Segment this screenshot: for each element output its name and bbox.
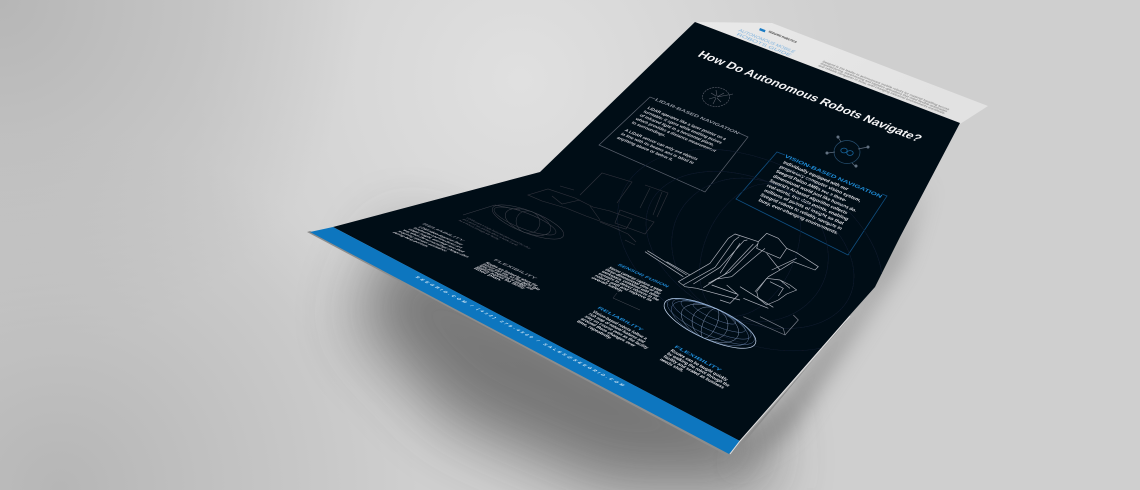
dark poster face [333,22,960,441]
icon: lidar [702,88,733,106]
body: lidar: in line with its beams and is blind to [620,132,696,165]
body: vision: Seegrid's AI-based algorithm collects [768,178,849,215]
text block: flexibility: facility and scaled as business [662,354,726,390]
text block: dim reliability: requiring operator assistance [396,230,449,252]
body: vision: busy, ever-changing environments. [757,198,840,235]
text block: dim flexibility: floor plan. [472,267,504,282]
text block: sensor fusion: workspace, combined with other [599,270,661,298]
text block: reliability: Vision-based robots follow a [591,310,649,340]
body: vision: proprietary computer vision system, [778,165,863,203]
body: lidar [614,105,730,171]
text block: dim flexibility: FLEXIBILITY [492,258,539,280]
text block: flexibility: by walking the robot through the [666,351,732,388]
text block: reliability: around them changes over [579,317,637,347]
text block: sensor fusion: SENSOR FUSION [616,263,670,288]
text block: sensor fusion: robot's path and improve its [593,274,655,302]
faint globe lines behind robots [617,148,882,351]
text block: dim reliability: single height, and may lose their [407,228,467,253]
body: lidar: of infrared light in a horizontal plane, [638,113,716,147]
flap logo and header text [735,28,951,115]
caption: lidar diagram: and cannot see anything above or below it at all [461,218,519,246]
diagram: vision robot with forks [645,233,818,335]
heading: vision: VISION-BASED NAVIGATION [783,154,884,200]
text block: reliability [575,306,664,354]
body: vision: Seegrid robots to reliably navigate in [759,193,843,231]
icon: vision [826,136,869,167]
text block: dim flexibility: time and expertise to update and [478,264,536,291]
text block: sensor fusion: overall safety. [590,276,625,292]
text block: reliability: rich map of natural features and [587,312,647,344]
paper edge thickness [307,231,850,456]
body: lidar: A LiDAR sensor can only see objects [624,128,700,161]
text block: dim reliability: RELIABILITY [421,223,466,241]
text block: sensor fusion: sensors to detect objects in the [597,272,662,302]
text block: flexibility: needs shift. [659,357,685,373]
body: lidar: LiDAR operates like a laser pointer on a [646,106,728,141]
body: vision: millions of points of insight so that [763,188,846,226]
callout line: sensor fusion [613,293,640,310]
brochure paper [307,22,988,456]
heading: lidar: LIDAR-BASED NAVIGATION [654,98,741,135]
body: lidar: to surroundings. [630,120,667,137]
text block: sensor fusion [589,262,679,306]
footer contact text: SEEGRID.COM / (412) 379-4500 / SALES@SEEGRID.COM [414,276,626,386]
body: lidar: turntable: it spins while emitting pulses [642,109,724,145]
body: vision: Seegrid Palion AMRs see a three- [775,169,848,203]
body: lidar: anything above or below it. [616,136,675,162]
text block: sensor fusion: Stereo cameras capture a wide [607,266,665,292]
panel: lidar-based navigation [599,97,748,192]
body: vision: dimensional world just like humans do. [772,174,858,213]
text block: reliability: stay on course even as the facility [583,315,650,350]
diagram: lidar robot (dim) [528,173,668,245]
text block: dim flexibility: sensor can see, so new paths take [481,263,543,291]
text block: dim reliability: LiDAR robots depend on fixed [417,226,464,245]
flap logo and header text: ROBOTS GUIDE [735,32,793,57]
flap logo and header text: Seegrid is the leader in autonomous mobile robots for material handling across [821,60,951,111]
caption: lidar diagram: LiDAR scans a single horizontal plane around the robot [465,217,532,249]
title: How Do Autonomous Robots Navigate? [695,50,924,144]
icon: lidar sensor disc (dim) [463,198,567,246]
text block: flexibility: FLEXIBILITY [673,344,723,372]
text block: reliability: time, repeatedly. [576,319,614,340]
text block: dim flexibility: deploy across the facility [475,265,528,290]
text block: reliability: RELIABILITY [596,306,645,331]
body: vision [753,160,869,235]
flap logo and header text: manufacturing, warehousing and logistics operations that need flexible automation [819,62,949,113]
body: lidar: which provides a distance measurement [633,116,718,153]
body: vision: real-world, live data points, enabling [766,183,850,221]
white folded top flap [695,22,988,124]
flap logo and header text: SEEGRID ROBOTICS [767,30,798,44]
blue footer strip [310,227,740,454]
text block: dim flexibility: Routes are limited by where the [484,261,540,287]
text block: dim reliability: during busy periods. [391,231,431,247]
light right page edge [730,316,850,454]
flap logo and header text: and reliable navigation in busy, ever-changing industrial environments worldwide. [817,64,947,115]
text block: dim reliability: way when the surroundings change often [401,229,471,258]
text block: flexibility [658,344,740,394]
body: vision: Individually equipped with our [782,160,850,191]
panel: vision-based navigation [736,152,887,255]
text block: sensor fusion: three-dimensional view of the [604,268,663,295]
text block: dim reliability [387,223,494,260]
icon: vision sensor wireframe disc [658,289,762,358]
text block: dim reliability: landmarks and structures at a [412,227,465,249]
flap logo and header text: AUTONOMOUS MOBILE [737,28,797,54]
text block: flexibility: Routes can be taught quickly [669,348,730,382]
caption: lidar diagram: as it moves through the facility [457,219,501,240]
